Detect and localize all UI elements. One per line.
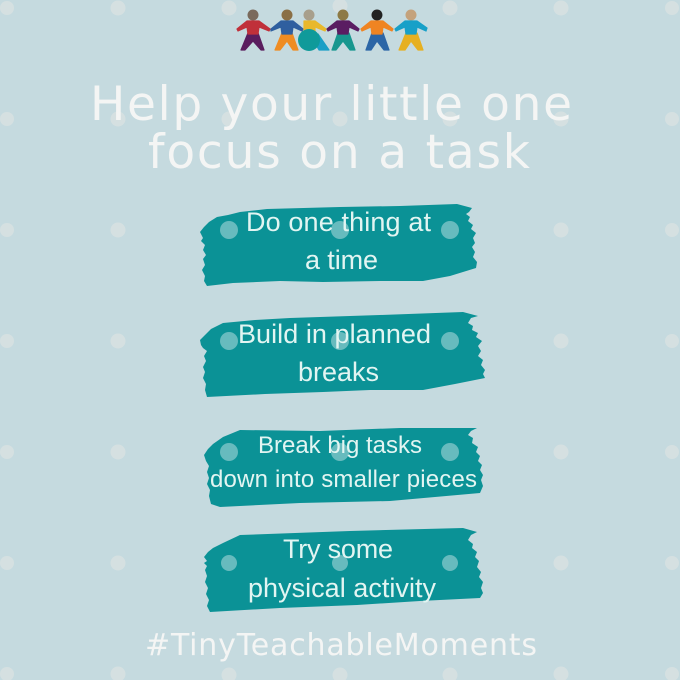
text: do one thing at a time: Do one thing at (246, 207, 431, 237)
dots over the brush panels (220, 221, 459, 571)
text: build in planned breaks: Build in planned (238, 319, 431, 349)
brush panel: build in planned breaks (200, 312, 485, 397)
brush panel: try some physical activity (204, 528, 483, 612)
text: try some physical activity: physical activity (248, 573, 436, 603)
text: build in planned breaks (238, 319, 431, 387)
figure 3: wheelchair user (298, 10, 329, 51)
title: focus on a task (148, 125, 531, 180)
figure 4 (327, 10, 359, 50)
title: Help your little one (90, 77, 572, 132)
text: try some physical activity: Try some (283, 534, 393, 564)
text: break big tasks down into smaller pieces: down into smaller pieces (210, 466, 477, 493)
brush panel: break big tasks (204, 428, 483, 507)
text: do one thing at a time: a time (305, 245, 378, 275)
text: break big tasks down into smaller pieces: Break big tasks (258, 432, 422, 459)
text: break big tasks down into smaller pieces (210, 432, 477, 493)
icon: row of paper-chain people (237, 10, 427, 51)
hashtag: #TinyTeachableMoments (145, 628, 537, 663)
figure 6 (395, 10, 427, 50)
brush panel: do one thing at a time (200, 204, 477, 286)
figure 1 (237, 10, 270, 50)
figure 5 (361, 10, 393, 50)
text: do one thing at a time (246, 207, 431, 275)
figure 2 (271, 10, 303, 50)
text: try some physical activity (248, 534, 436, 603)
text: build in planned breaks: breaks (298, 357, 379, 387)
title (90, 77, 572, 180)
